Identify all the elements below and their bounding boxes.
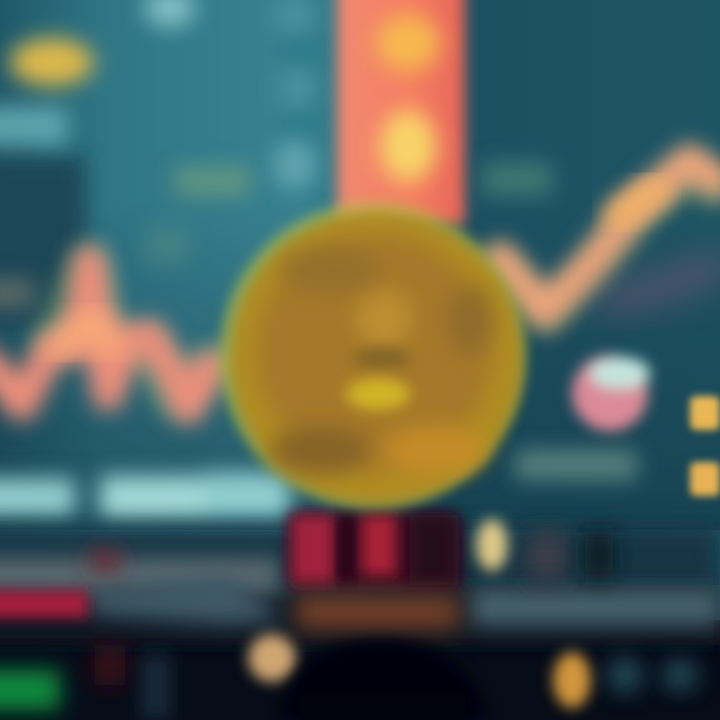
panel: dark bottom console [0, 526, 720, 720]
icon: yellow right tags [690, 396, 720, 496]
silhouette: viewer's head [280, 640, 486, 720]
faint labels [0, 162, 637, 480]
band: pale teal strip [0, 472, 290, 520]
icon: gold coin [220, 203, 524, 507]
panel: glowing orange pillar [337, 0, 465, 225]
line chart: right rising [500, 160, 716, 318]
console lights [248, 519, 698, 708]
icon: yellow label blob top left [10, 38, 94, 86]
icon: pink and white ball [572, 355, 650, 431]
line chart: left zigzag [0, 262, 212, 408]
coin face [270, 248, 492, 474]
warm haze under stand [295, 594, 460, 630]
icon: red coin stand [288, 512, 460, 590]
pillar lights [376, 15, 440, 182]
